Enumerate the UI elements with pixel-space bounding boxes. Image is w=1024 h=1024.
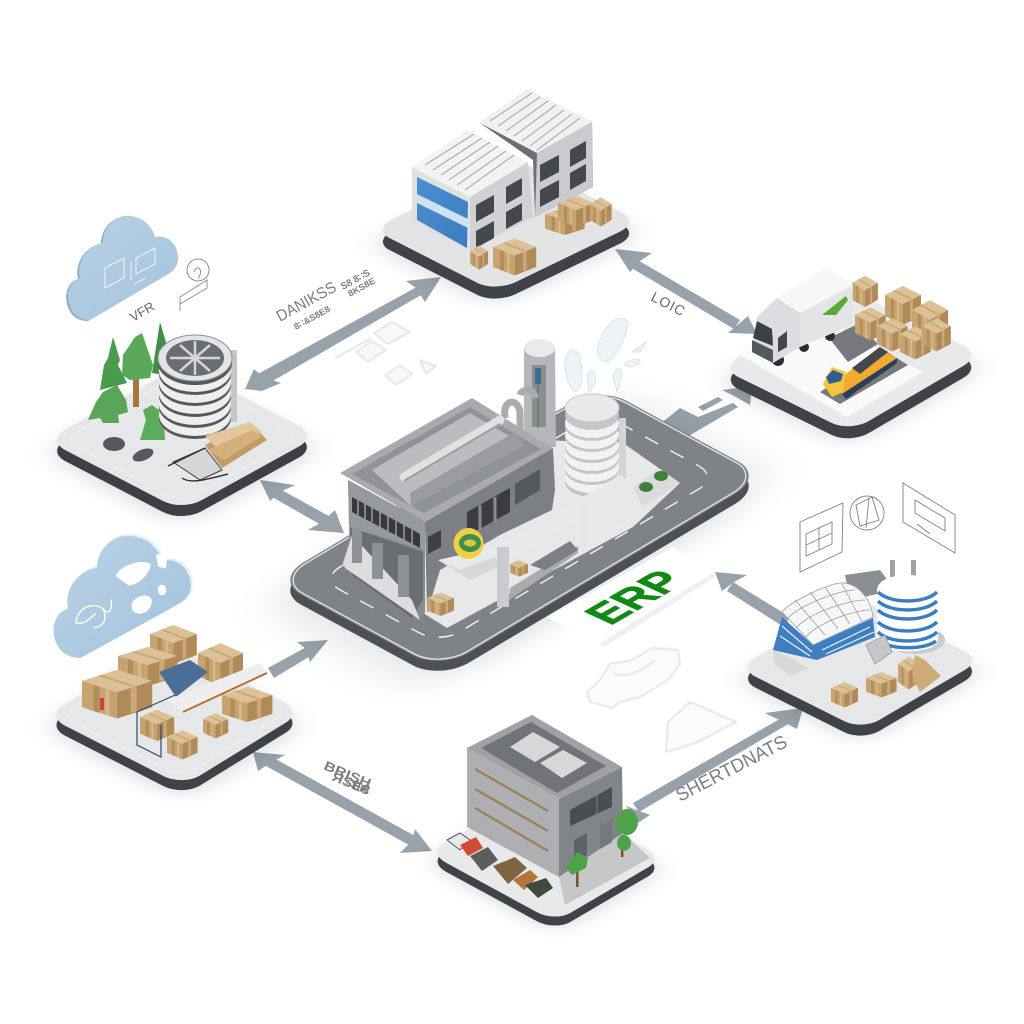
label: DANIKSS: DANIKSS [274, 279, 339, 326]
label: VFR: VFR [127, 299, 157, 325]
parked cars [447, 833, 553, 898]
label: DANIKSS: 8KS8E [346, 276, 377, 299]
label: SHERTDNATS: SHERTDNATS [673, 732, 791, 806]
right hub boxes [831, 655, 941, 708]
coiled tank with fan [158, 335, 237, 439]
cloud: lower left hub [54, 534, 193, 658]
arrow: right hub to ERP [715, 572, 790, 627]
stacked boxes at truck hub [852, 276, 951, 360]
conveyor and stacked cartons [82, 625, 272, 760]
yellow badge [454, 528, 484, 559]
dome building and cylinder [773, 560, 945, 676]
tall silo [524, 339, 556, 447]
label: BRISH: BRISH [322, 758, 374, 791]
sketched panels above right hub [800, 483, 955, 572]
platform: lower left hub [46, 642, 303, 798]
label: BRISH: ∷8K [344, 778, 371, 797]
truck hub white floor and tracks [740, 312, 923, 417]
pipes by the silo [505, 390, 535, 440]
bottom hub paved forecourt [559, 833, 650, 905]
label: BRISH [322, 758, 374, 798]
label: DANIKSS [274, 267, 377, 332]
label: DANIKSS: 8∷&S8E8 [292, 304, 332, 332]
platform: right hub [738, 598, 982, 742]
label: DANIKSS: S8 8∷S [339, 267, 373, 293]
arrow: warehouse to truck hub [615, 249, 757, 334]
label: LOIC: LOIC [649, 288, 689, 320]
office building [467, 715, 623, 877]
arrow: lower left to centre [268, 640, 328, 678]
arrow: bottom building to right hub [626, 708, 803, 823]
building pad [343, 440, 680, 628]
planter [633, 470, 680, 507]
arrow: lower left to bottom building [253, 752, 432, 853]
small sketched icons near forest cloud [180, 259, 209, 311]
platform: warehouse hub [372, 159, 640, 305]
locomotive [823, 347, 897, 399]
platform: truck hub [720, 291, 982, 445]
warehouse building: rear [480, 90, 593, 217]
trees at office [566, 809, 638, 887]
white gantry and pipe [438, 474, 624, 607]
ERP card: ERP [574, 565, 696, 630]
main factory building [340, 398, 555, 620]
platform: forest hub [46, 365, 318, 524]
platform: central road base [274, 386, 765, 684]
warehouse building: front with blue door [412, 130, 533, 250]
water vapour plume [565, 318, 646, 392]
ghost icons: upper centre [335, 322, 436, 385]
trees [88, 322, 170, 440]
forest hub floor marks and pallet [103, 422, 267, 481]
warehouse boxes [470, 196, 612, 276]
central cartons [427, 560, 528, 616]
arrow: centre to forest [260, 480, 344, 533]
arrow: centre to truck hub [660, 386, 752, 437]
label: BRISH: ЯSE8 [330, 769, 372, 798]
coiled silo [565, 394, 626, 497]
truck [752, 267, 853, 366]
platform: bottom hub [428, 789, 664, 932]
ERP card [547, 547, 715, 647]
arrow: forest to warehouse [245, 277, 441, 391]
cloud: forest hub [66, 216, 178, 321]
ghost icons: lower centre [587, 648, 736, 752]
